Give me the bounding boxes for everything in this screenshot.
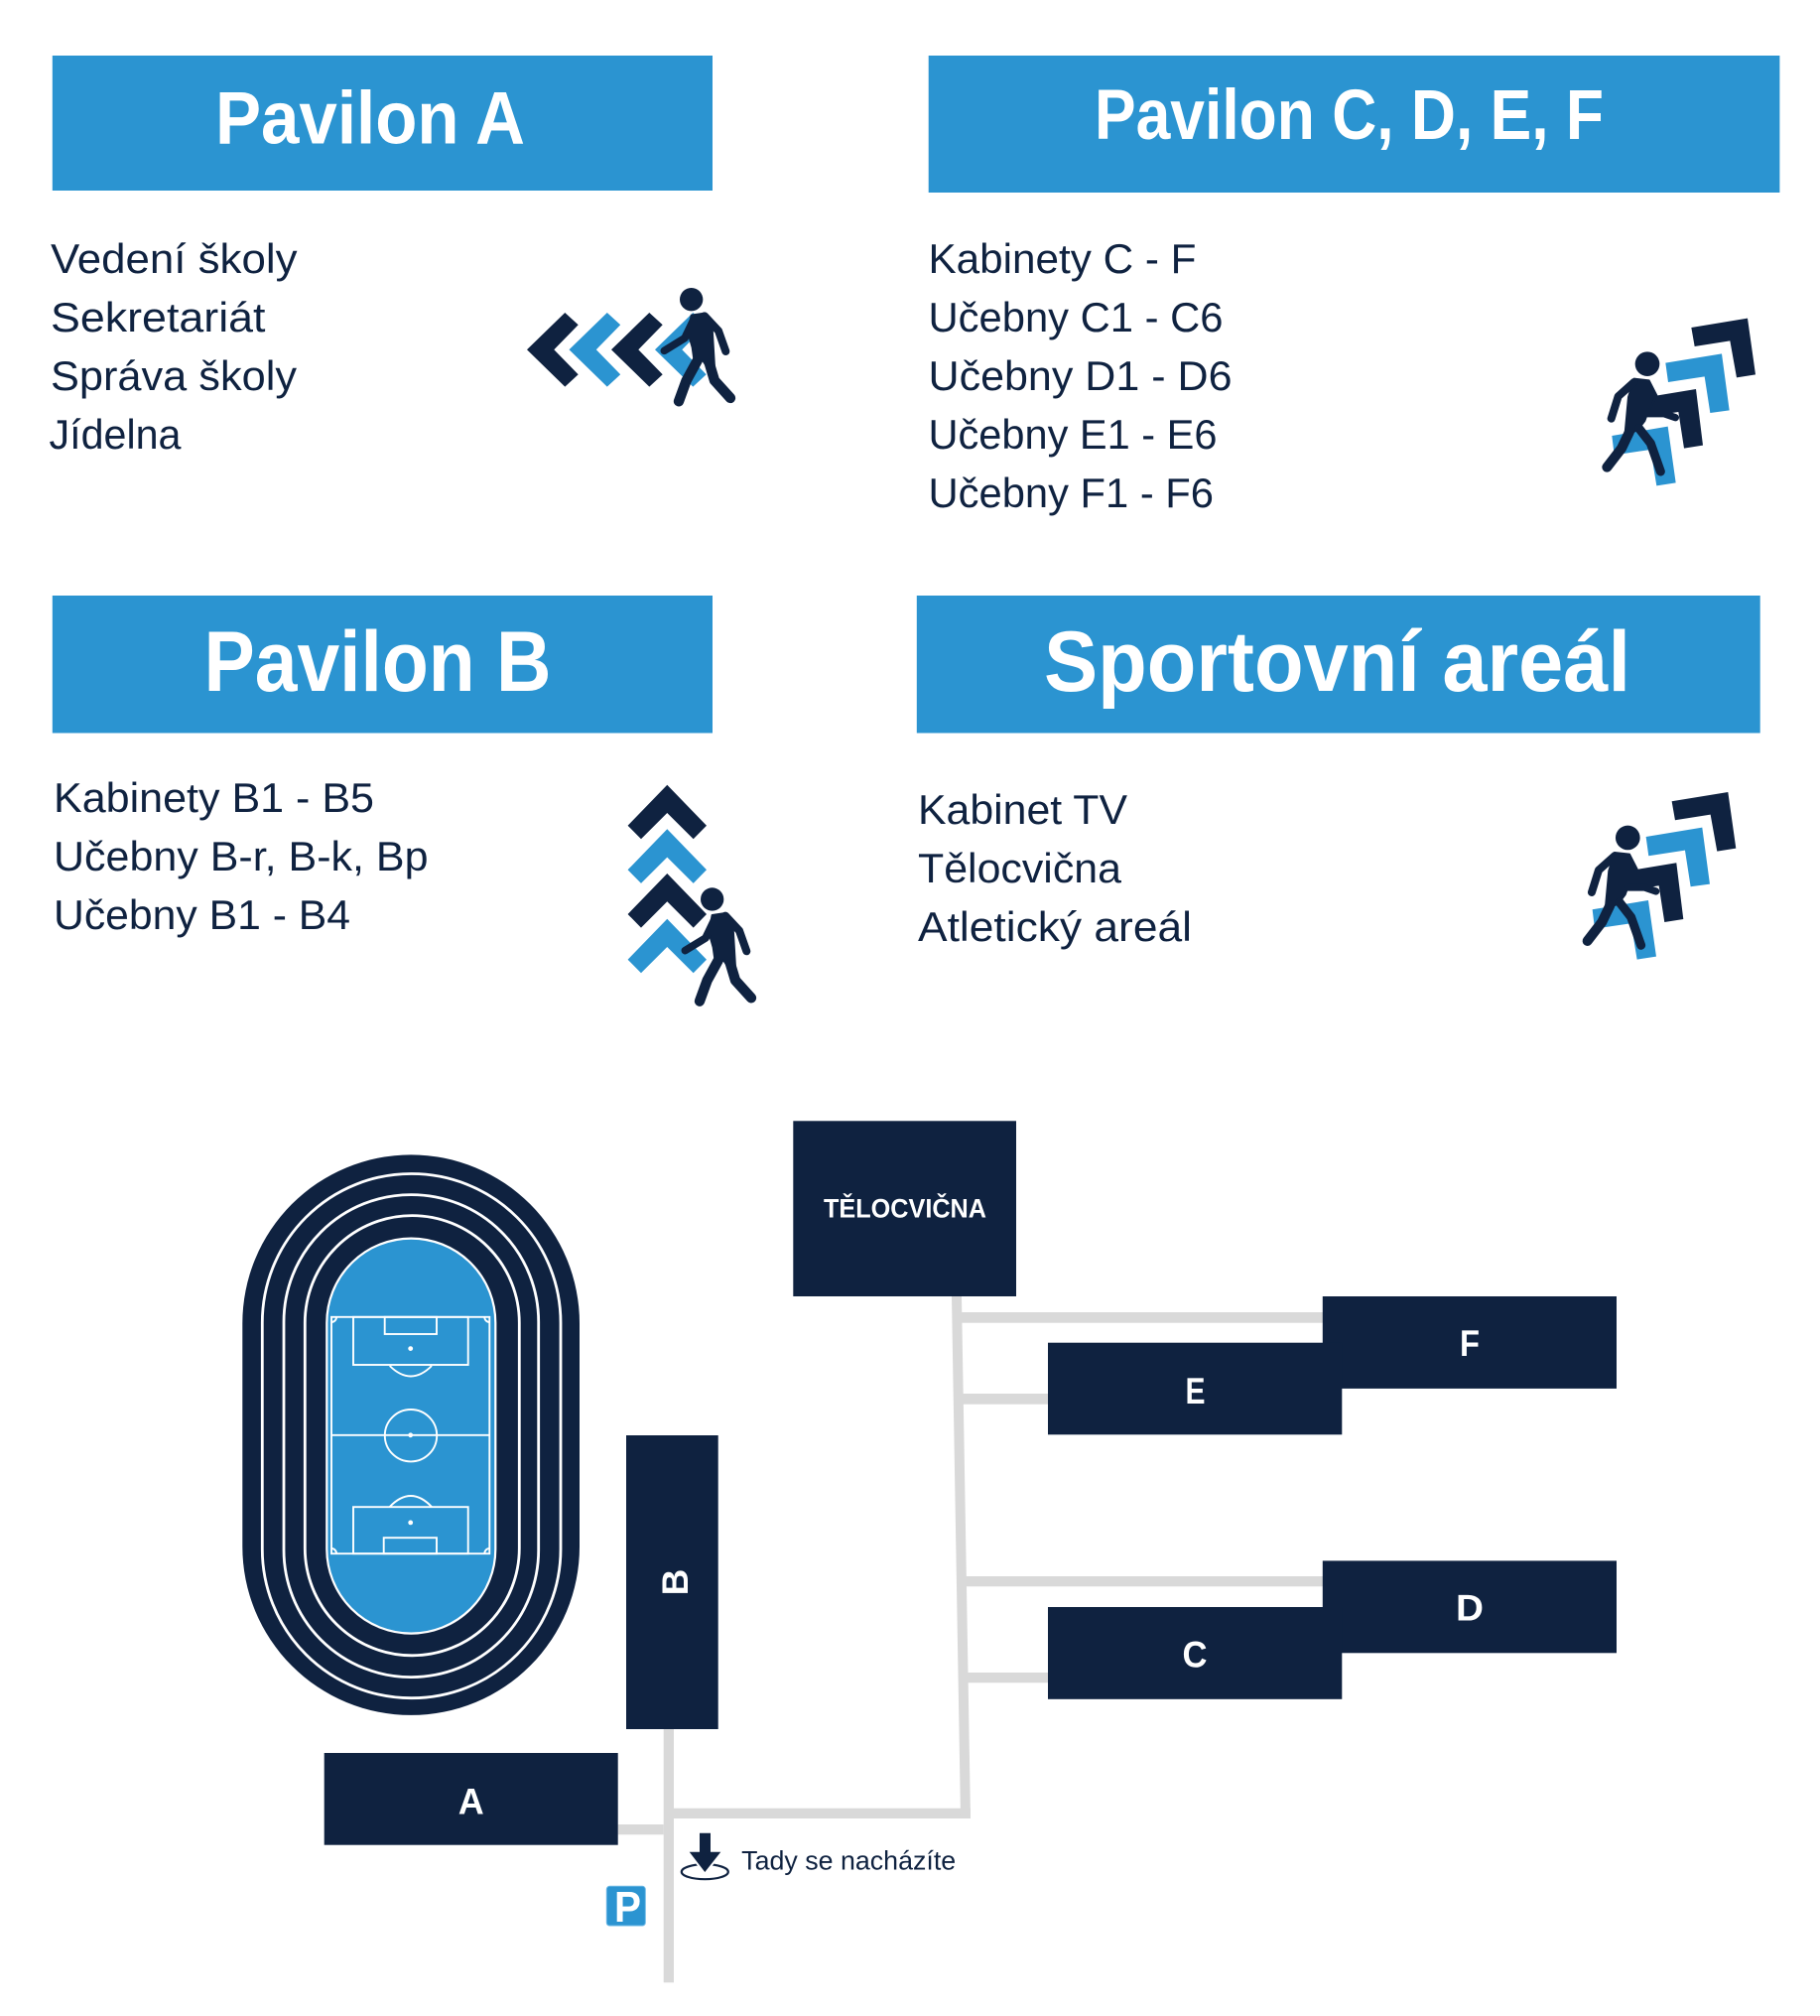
text block: Pavilon C-F rooms: Učebny E1 - E6 (929, 411, 1217, 458)
text block: Pavilon C-F rooms: Učebny D1 - D6 (929, 352, 1233, 399)
text block: Pavilon B rooms (54, 774, 429, 938)
label: you are here: Tady se nacházíte (741, 1845, 956, 1875)
icon: person climbing with chevrons (1607, 319, 1755, 485)
building: A: A (458, 1781, 484, 1821)
heading bar: Sportovní areál (917, 596, 1760, 733)
map: campus site plan (242, 1121, 1617, 1982)
text block: Pavilon A rooms: Správa školy (51, 352, 297, 399)
text block: Pavilon A rooms: Jídelna (50, 411, 182, 458)
building: F (1323, 1296, 1617, 1389)
panel: Pavilon B (53, 596, 751, 1002)
icon: you are here marker (682, 1833, 728, 1879)
text block: Pavilon B rooms: Učebny B-r, B-k, Bp (54, 833, 429, 879)
heading bar: Pavilon C, D, E, F: Pavilon C, D, E, F (1095, 76, 1604, 155)
text block: Pavilon C-F rooms: Kabinety C - F (929, 235, 1197, 282)
text block: Pavilon B rooms: Kabinety B1 - B5 (54, 774, 374, 821)
building: F: F (1460, 1323, 1480, 1364)
icon: person walking with up chevrons (628, 785, 751, 1002)
building: B: B (655, 1569, 696, 1595)
heading bar: Pavilon C, D, E, F (929, 56, 1779, 193)
text block: Pavilon A rooms (50, 235, 298, 458)
panel: Sportovní areál (917, 596, 1760, 960)
building: A (325, 1753, 618, 1845)
heading bar: Pavilon B: Pavilon B (204, 614, 552, 710)
heading bar: Sportovní areál: Sportovní areál (1044, 614, 1630, 710)
icon: parking sign: P (614, 1883, 641, 1932)
icon: person walking left with chevrons (527, 288, 730, 401)
building: C: C (1183, 1634, 1207, 1676)
heading bar: Pavilon A: Pavilon A (215, 75, 525, 159)
icon: person climbing with chevrons (1588, 792, 1736, 960)
text block: Pavilon C-F rooms (929, 235, 1233, 516)
text block: Pavilon C-F rooms: Učebny C1 - C6 (929, 294, 1223, 340)
panel: Pavilon C, D, E, F (929, 56, 1779, 516)
building: Tělocvična (793, 1121, 1016, 1296)
text block: Pavilon C-F rooms: Učebny F1 - F6 (929, 470, 1214, 516)
building: D (1323, 1560, 1617, 1653)
text block: sports rooms: Kabinet TV (918, 786, 1127, 833)
text block: sports rooms: Atletický areál (918, 903, 1192, 950)
text block: Pavilon B rooms: Učebny B1 - B4 (54, 891, 350, 938)
athletics track and football pitch (242, 1154, 580, 1715)
building: C (1048, 1607, 1342, 1699)
text block: sports rooms: Tělocvična (918, 845, 1122, 891)
text block: Pavilon A rooms: Vedení školy (51, 235, 298, 282)
building: E (1048, 1343, 1342, 1434)
paths between buildings (618, 1296, 1323, 1982)
building: Tělocvična: TĚLOCVIČNA (824, 1193, 986, 1224)
building: B (626, 1435, 718, 1729)
heading bar: Pavilon B (53, 596, 713, 733)
heading bar: Pavilon A (53, 56, 713, 191)
panel: Pavilon A (50, 56, 730, 458)
building: D: D (1456, 1588, 1484, 1629)
text block: sports rooms (918, 786, 1192, 950)
text block: Pavilon A rooms: Sekretariát (51, 294, 266, 340)
building: E: E (1185, 1371, 1205, 1411)
